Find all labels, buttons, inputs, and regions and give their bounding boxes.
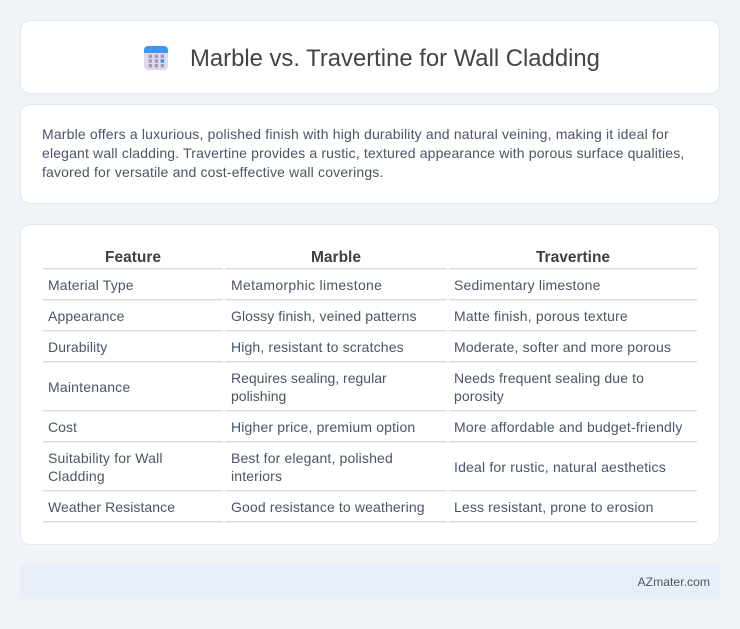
row: maintenance: polishing	[231, 388, 286, 404]
icon: calendar	[144, 46, 168, 70]
panel: intro text	[20, 104, 720, 204]
row: maintenance: Maintenance	[48, 379, 130, 395]
intro paragraph: Marble offers a luxurious, polished finish with high durability and natural veining, making it ideal for	[42, 126, 669, 142]
row: suitability: interiors	[231, 468, 282, 484]
intro paragraph: elegant wall cladding. Travertine provides a rustic, textured appearance with porous surface qualities,	[42, 145, 684, 161]
table header: Travertine	[536, 249, 610, 266]
row: weather resistance: Good resistance to weathering	[231, 499, 425, 515]
row: suitability: Suitability for Wall	[48, 450, 163, 466]
row: material type	[48, 277, 601, 293]
row: weather resistance: Less resistant, prone to erosion	[454, 499, 654, 515]
row: appearance: Glossy finish, veined patterns	[231, 308, 417, 324]
row: appearance	[48, 308, 628, 324]
row: maintenance: Requires sealing, regular	[231, 370, 387, 386]
intro paragraph	[42, 126, 684, 180]
row: suitability: Cladding	[48, 468, 105, 484]
row: cost	[48, 419, 683, 435]
row: weather resistance: Weather Resistance	[48, 499, 175, 515]
table header: Feature	[105, 249, 161, 266]
row: durability	[48, 339, 671, 355]
panel: title card	[20, 20, 720, 94]
row: appearance: Matte finish, porous texture	[454, 308, 628, 324]
row: suitability: Best for elegant, polished	[231, 450, 393, 466]
row: durability: High, resistant to scratches	[231, 339, 404, 355]
title: Marble vs. Travertine for Wall Cladding	[190, 45, 600, 72]
row: maintenance: porosity	[454, 388, 504, 404]
row: durability: Durability	[48, 339, 107, 355]
row: material type: Sedimentary limestone	[454, 277, 601, 293]
row: material type: Material Type	[48, 277, 134, 293]
row: cost: Higher price, premium option	[231, 419, 415, 435]
row: durability: Moderate, softer and more porous	[454, 339, 671, 355]
row: weather resistance	[48, 499, 654, 515]
intro paragraph: favored for versatile and cost-effective wall coverings.	[42, 164, 384, 180]
footer credit: AZmater.com	[638, 575, 710, 589]
row: appearance: Appearance	[48, 308, 125, 324]
panel: comparison table	[20, 224, 720, 545]
row: material type: Metamorphic limestone	[231, 277, 382, 293]
row: cost: Cost	[48, 419, 77, 435]
row: maintenance: Needs frequent sealing due to	[454, 370, 644, 386]
row: suitability	[48, 450, 666, 484]
row: maintenance	[48, 370, 644, 404]
row: suitability: Ideal for rustic, natural aesthetics	[454, 459, 666, 475]
table header	[105, 249, 610, 266]
row: cost: More affordable and budget-friendly	[454, 419, 683, 435]
table header: Marble	[311, 249, 361, 266]
footer bar	[20, 565, 720, 599]
